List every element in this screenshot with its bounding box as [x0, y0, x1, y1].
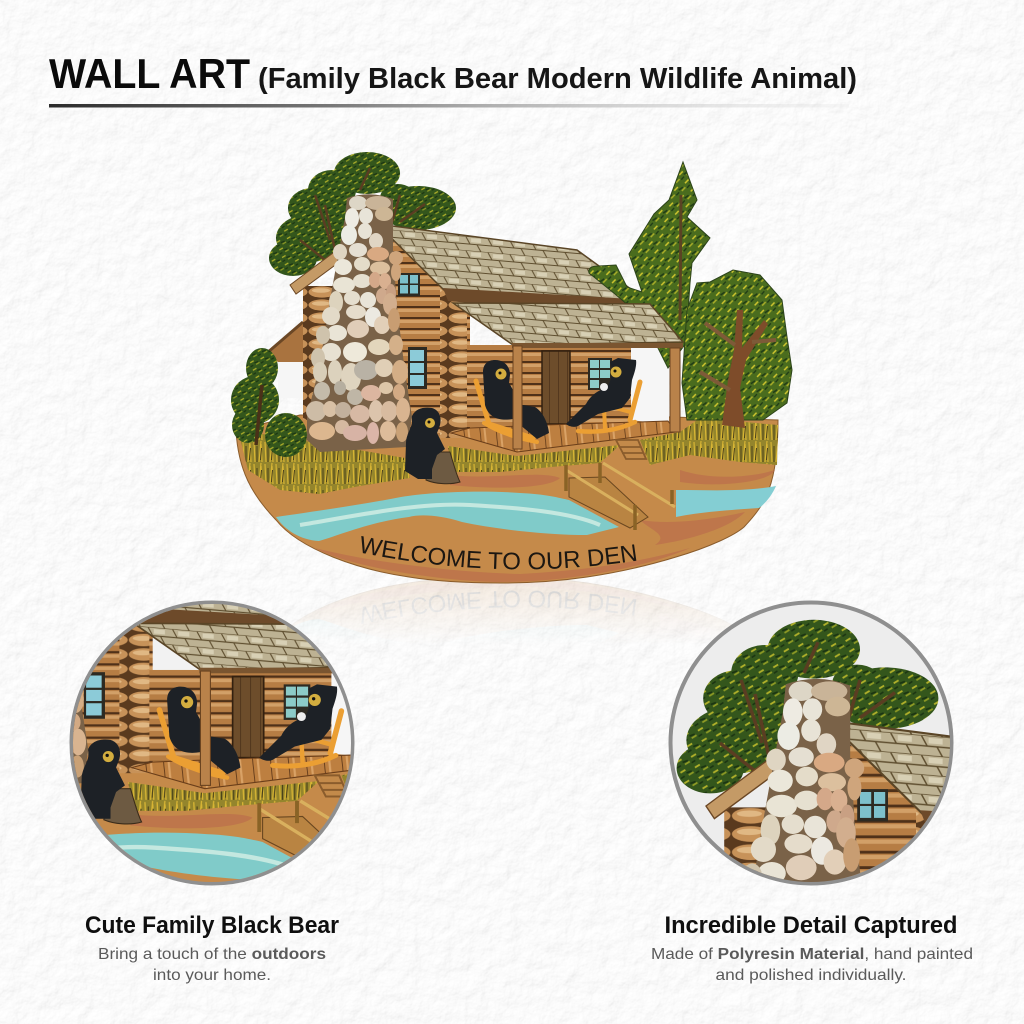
- porch eave: [512, 343, 683, 348]
- roof fascia: [443, 288, 651, 306]
- plaque base ground: [236, 415, 778, 583]
- main product: cabin wall plaque: WELCOME TO OUR DEN: [361, 536, 636, 616]
- left detail circle: [70, 600, 354, 886]
- gable window: [398, 273, 420, 296]
- back gable extension: [267, 322, 304, 398]
- right caption: Made of Polyresin Material , hand painted: [651, 946, 973, 963]
- chimney: [306, 194, 412, 452]
- porch deck: [451, 421, 676, 452]
- right detail circle: [668, 600, 954, 886]
- main log wall under gable: [392, 240, 470, 436]
- small side roof: [290, 250, 338, 294]
- reflection of the plaque: [292, 580, 732, 627]
- porch back wall: [467, 345, 632, 427]
- right caption: and polished individually.: [716, 967, 906, 984]
- left caption: Bring a touch of the outdoors: [98, 946, 326, 963]
- corner log columns: [440, 288, 467, 438]
- main product: cabin wall plaque: [191, 152, 792, 624]
- tall pine tree: [589, 162, 710, 368]
- left rocking chair: [476, 381, 537, 442]
- side log wall: [303, 286, 340, 420]
- left bush and small tree: [231, 348, 307, 457]
- wooden footbridge: [566, 463, 675, 530]
- title: WALL ART: [49, 50, 250, 97]
- left tree behind chimney: [269, 152, 456, 276]
- ground bear: [405, 408, 445, 479]
- porch window: [588, 358, 612, 390]
- title: [49, 50, 857, 97]
- porch door: [542, 351, 570, 424]
- left caption: Cute Family Black Bear: [85, 912, 339, 939]
- river: [276, 486, 776, 541]
- left porch bear: [483, 360, 549, 439]
- deck steps: [616, 440, 646, 459]
- left caption: into your home.: [153, 967, 271, 984]
- tree stump: [426, 452, 460, 484]
- pine trunk: [680, 195, 681, 320]
- side window: [408, 347, 427, 389]
- left caption: [85, 912, 339, 984]
- right porch bear: [566, 358, 636, 427]
- right caption: Incredible Detail Captured: [664, 912, 958, 939]
- main roof: [377, 224, 650, 303]
- right leafy tree: [682, 270, 792, 428]
- right caption: [651, 912, 973, 984]
- title underline: [49, 104, 849, 108]
- title: (Family Black Bear Modern Wildlife Animal): [258, 63, 857, 95]
- welcome lettering: [358, 552, 641, 569]
- right rocking chair: [578, 382, 640, 432]
- porch posts: [513, 346, 680, 449]
- porch roof: [453, 303, 683, 345]
- pink painted streaks on base: [315, 470, 775, 582]
- grass: [238, 418, 778, 494]
- white opening beside porch: [631, 348, 669, 425]
